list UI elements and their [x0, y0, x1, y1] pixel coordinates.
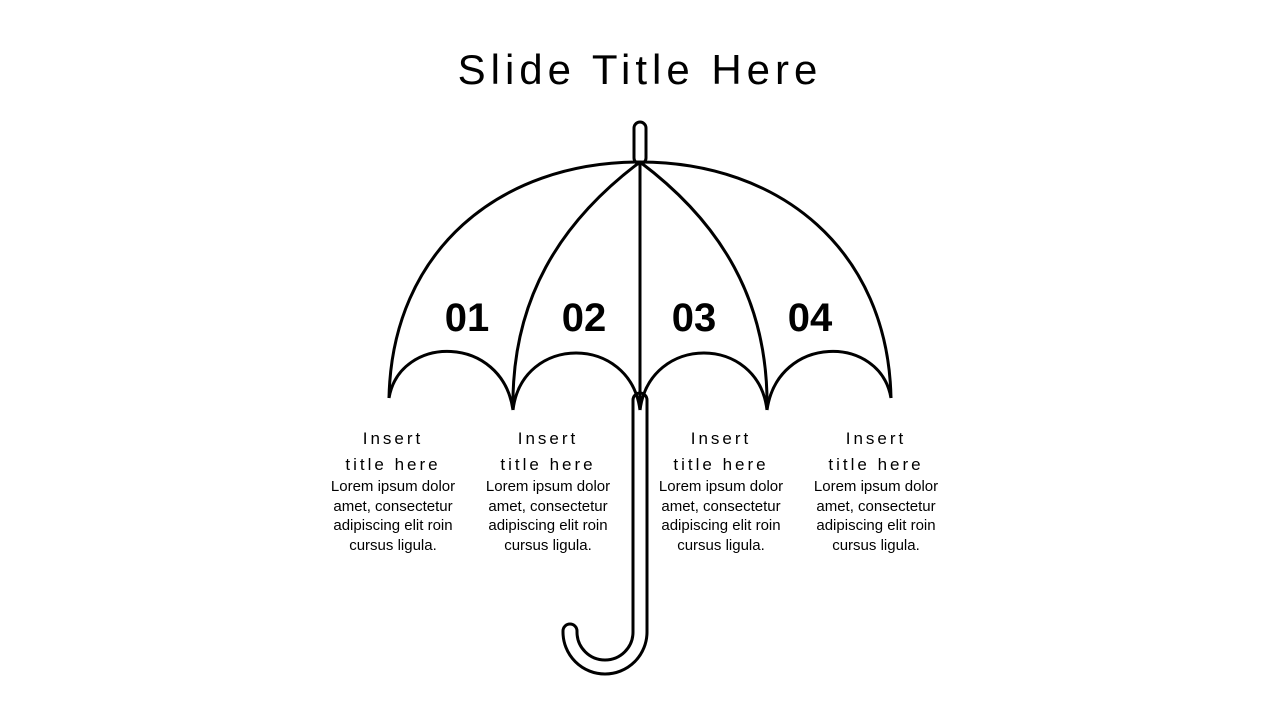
- caption 04: [814, 429, 938, 554]
- panel numbers: 01: [445, 296, 489, 340]
- panel numbers: 04: [788, 296, 833, 340]
- caption 01: [331, 429, 455, 554]
- caption 03: Lorem ipsum dolor amet, consectetur adipiscing elit roin cursus ligula.: [659, 478, 783, 554]
- caption 02: [486, 429, 610, 554]
- caption 03: title here: [673, 455, 769, 474]
- panel numbers: 03: [672, 296, 716, 340]
- umbrella handle: [570, 400, 640, 667]
- caption 02: title here: [500, 455, 596, 474]
- caption 01: title here: [345, 455, 441, 474]
- panel numbers: 02: [562, 296, 606, 340]
- caption 01: Insert: [363, 429, 423, 448]
- caption 02: Lorem ipsum dolor amet, consectetur adipiscing elit roin cursus ligula.: [486, 478, 610, 554]
- caption 02: Insert: [518, 429, 578, 448]
- umbrella tip: [634, 122, 646, 164]
- umbrella canopy: [389, 162, 891, 410]
- title: Slide Title Here: [458, 46, 822, 93]
- panel numbers: [445, 296, 833, 340]
- caption 04: title here: [828, 455, 924, 474]
- caption 03: [659, 429, 783, 554]
- caption 04: Insert: [846, 429, 906, 448]
- caption 03: Insert: [691, 429, 751, 448]
- caption 01: Lorem ipsum dolor amet, consectetur adipiscing elit roin cursus ligula.: [331, 478, 455, 554]
- caption 04: Lorem ipsum dolor amet, consectetur adipiscing elit roin cursus ligula.: [814, 478, 938, 554]
